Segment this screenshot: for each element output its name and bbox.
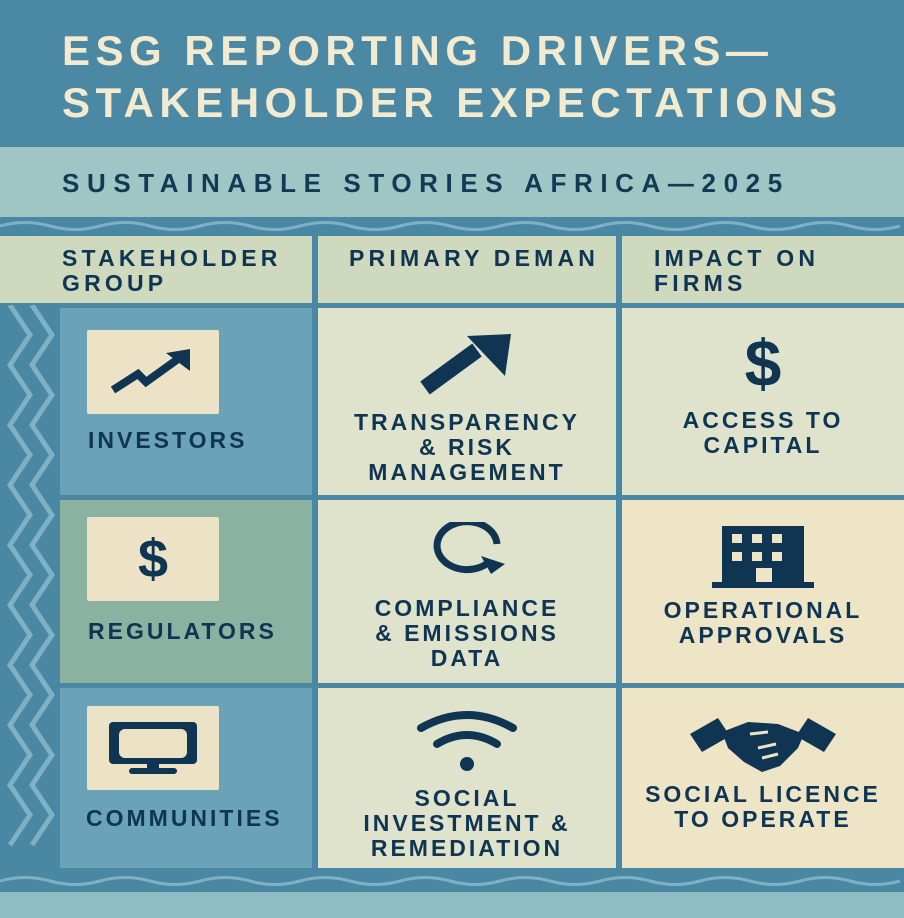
row2: regulators xyxy=(60,500,312,683)
icon: building xyxy=(712,526,814,588)
demand: social investment: SOCIAL xyxy=(415,785,519,811)
header: primary demand xyxy=(318,236,616,303)
title band xyxy=(0,0,904,146)
demand: social investment xyxy=(318,688,616,868)
demand: compliance: COMPLIANCE xyxy=(375,595,559,621)
impact: social licence xyxy=(622,688,904,868)
icon: handshake xyxy=(690,718,836,772)
header: impact on firms: FIRMS xyxy=(654,270,747,296)
wave band bottom xyxy=(0,876,900,886)
icon: trend arrow xyxy=(87,330,219,414)
demand: social investment: INVESTMENT & xyxy=(363,810,571,836)
row2: regulators: REGULATORS xyxy=(88,618,277,644)
icon: cycle xyxy=(434,522,505,574)
subtitle band xyxy=(0,147,904,217)
icon: wifi xyxy=(417,711,517,771)
header: impact on firms: IMPACT ON xyxy=(654,245,819,271)
left pattern strip xyxy=(7,305,55,846)
impact: social licence: TO OPERATE xyxy=(674,806,852,832)
impact: operational approvals: OPERATIONAL xyxy=(664,597,862,623)
wave band top xyxy=(0,221,900,231)
impact: operational approvals: APPROVALS xyxy=(679,622,847,648)
title xyxy=(62,27,843,126)
demand: transparency: MANAGEMENT xyxy=(368,459,566,485)
demand: compliance: DATA xyxy=(431,645,503,671)
demand: compliance xyxy=(318,500,616,683)
impact: access to capital xyxy=(622,308,904,495)
icon: dollar box: $ xyxy=(138,529,168,589)
bottom band xyxy=(0,892,904,918)
row1: investors: INVESTORS xyxy=(88,427,248,453)
header: impact on firms xyxy=(622,236,904,303)
demand: transparency xyxy=(318,308,616,495)
impact: access to capital: CAPITAL xyxy=(704,432,822,458)
title: ESG REPORTING DRIVERS— xyxy=(62,27,773,74)
demand: transparency: & RISK xyxy=(419,434,515,460)
header: stakeholder group xyxy=(0,236,312,303)
icon: monitor xyxy=(87,706,219,790)
impact: social licence: SOCIAL LICENCE xyxy=(645,781,881,807)
subtitle: SUSTAINABLE STORIES AFRICA—2025 xyxy=(62,168,790,198)
icon: arrow xyxy=(420,334,511,394)
impact: access to capital: ACCESS TO xyxy=(683,407,843,433)
header: primary demand: PRIMARY DEMAN xyxy=(349,245,599,271)
demand: transparency: TRANSPARENCY xyxy=(354,409,580,435)
icon: dollar: $ xyxy=(745,326,781,400)
impact: operational approvals xyxy=(622,500,904,683)
header: stakeholder group: STAKEHOLDER xyxy=(62,245,282,271)
row1: investors xyxy=(60,308,312,495)
header: stakeholder group: GROUP xyxy=(62,270,167,296)
icon: dollar box xyxy=(87,517,219,601)
demand: compliance: & EMISSIONS xyxy=(375,620,559,646)
demand: social investment: REMEDIATION xyxy=(371,835,563,861)
row3: communities xyxy=(60,688,312,868)
row3: communities: COMMUNITIES xyxy=(86,805,283,831)
title: STAKEHOLDER EXPECTATIONS xyxy=(62,79,843,126)
